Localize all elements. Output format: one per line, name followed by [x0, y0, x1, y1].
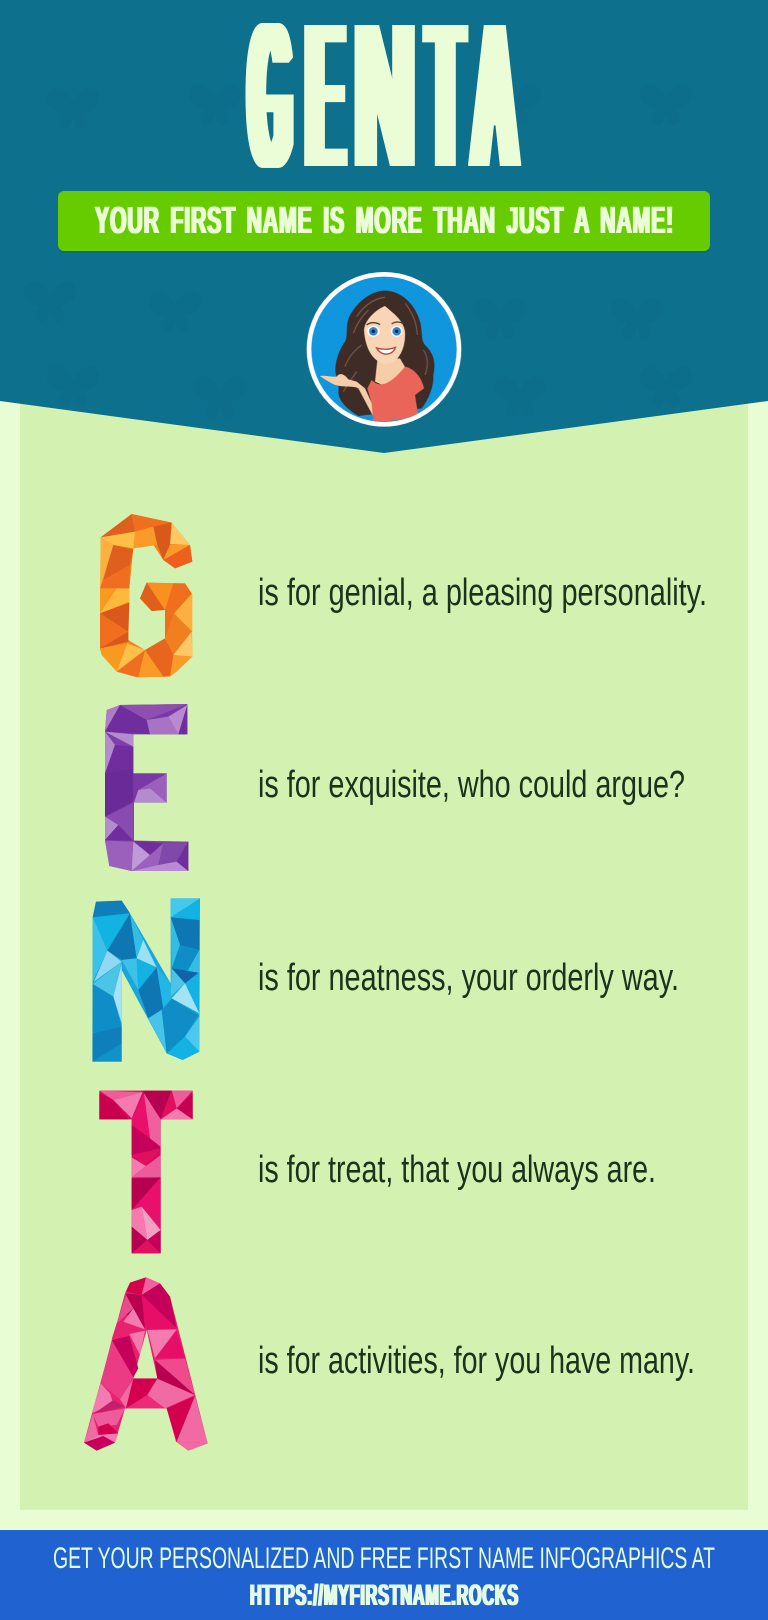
letter N: blue low-poly illustration	[92, 898, 200, 1062]
mouth	[377, 347, 395, 354]
letter G: orange low-poly illustration	[100, 514, 192, 677]
face	[364, 306, 405, 364]
avatar: cartoon woman in circle	[309, 274, 459, 424]
header banner	[0, 0, 768, 453]
neck and chest	[374, 358, 406, 384]
tagline bar	[58, 191, 710, 253]
eyes and brows	[367, 322, 403, 337]
panel: letters content	[20, 390, 748, 1510]
footer band	[0, 1530, 768, 1620]
footer URL: HTTPS://MYFIRSTNAME.ROCKS	[250, 1579, 519, 1612]
arm and hand	[320, 374, 373, 417]
letter A: pink low-poly illustration	[84, 1277, 208, 1451]
letter E: purple low-poly illustration	[105, 704, 188, 871]
letter T: magenta low-poly illustration	[99, 1091, 193, 1253]
shirt	[367, 367, 424, 423]
title	[245, 0, 522, 208]
hair	[335, 291, 434, 416]
